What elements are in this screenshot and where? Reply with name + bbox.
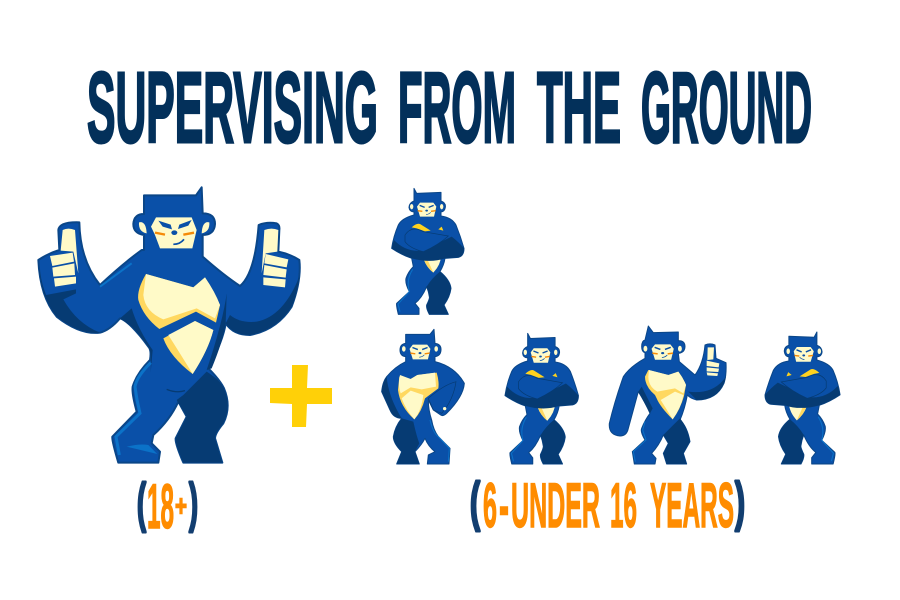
label: adult age: 18 xyxy=(147,472,174,542)
label: child age range: - xyxy=(499,471,509,541)
face xyxy=(151,217,197,248)
label: child age range: ( xyxy=(470,472,480,532)
label: adult age: + xyxy=(175,490,187,523)
label: child age range: ) xyxy=(735,472,745,532)
arm and leg shading xyxy=(38,260,299,463)
title: SUPERVISING xyxy=(87,52,378,164)
hands xyxy=(50,229,288,287)
title: THE xyxy=(537,52,621,164)
ears xyxy=(139,222,209,233)
gorilla with crossed arms, top row xyxy=(392,188,464,314)
gorilla with crossed arms, second in row xyxy=(505,333,578,464)
gorilla with one thumb up xyxy=(609,326,726,464)
text: YEARS xyxy=(650,471,734,541)
label: adult age: ( xyxy=(137,473,146,533)
title: FROM xyxy=(398,52,516,164)
label: child age range: 16 xyxy=(610,471,637,541)
adult gorilla giving two thumbs up xyxy=(38,187,300,463)
plus sign xyxy=(270,365,332,427)
label: child age range: 6 xyxy=(483,471,497,541)
label: adult age: ) xyxy=(189,473,198,533)
chest xyxy=(138,274,220,374)
gorilla with hand on hip xyxy=(382,329,464,464)
label: child age range: UNDER xyxy=(511,471,600,541)
label: adult age xyxy=(137,472,198,542)
gorilla with crossed arms, far right xyxy=(765,332,840,464)
